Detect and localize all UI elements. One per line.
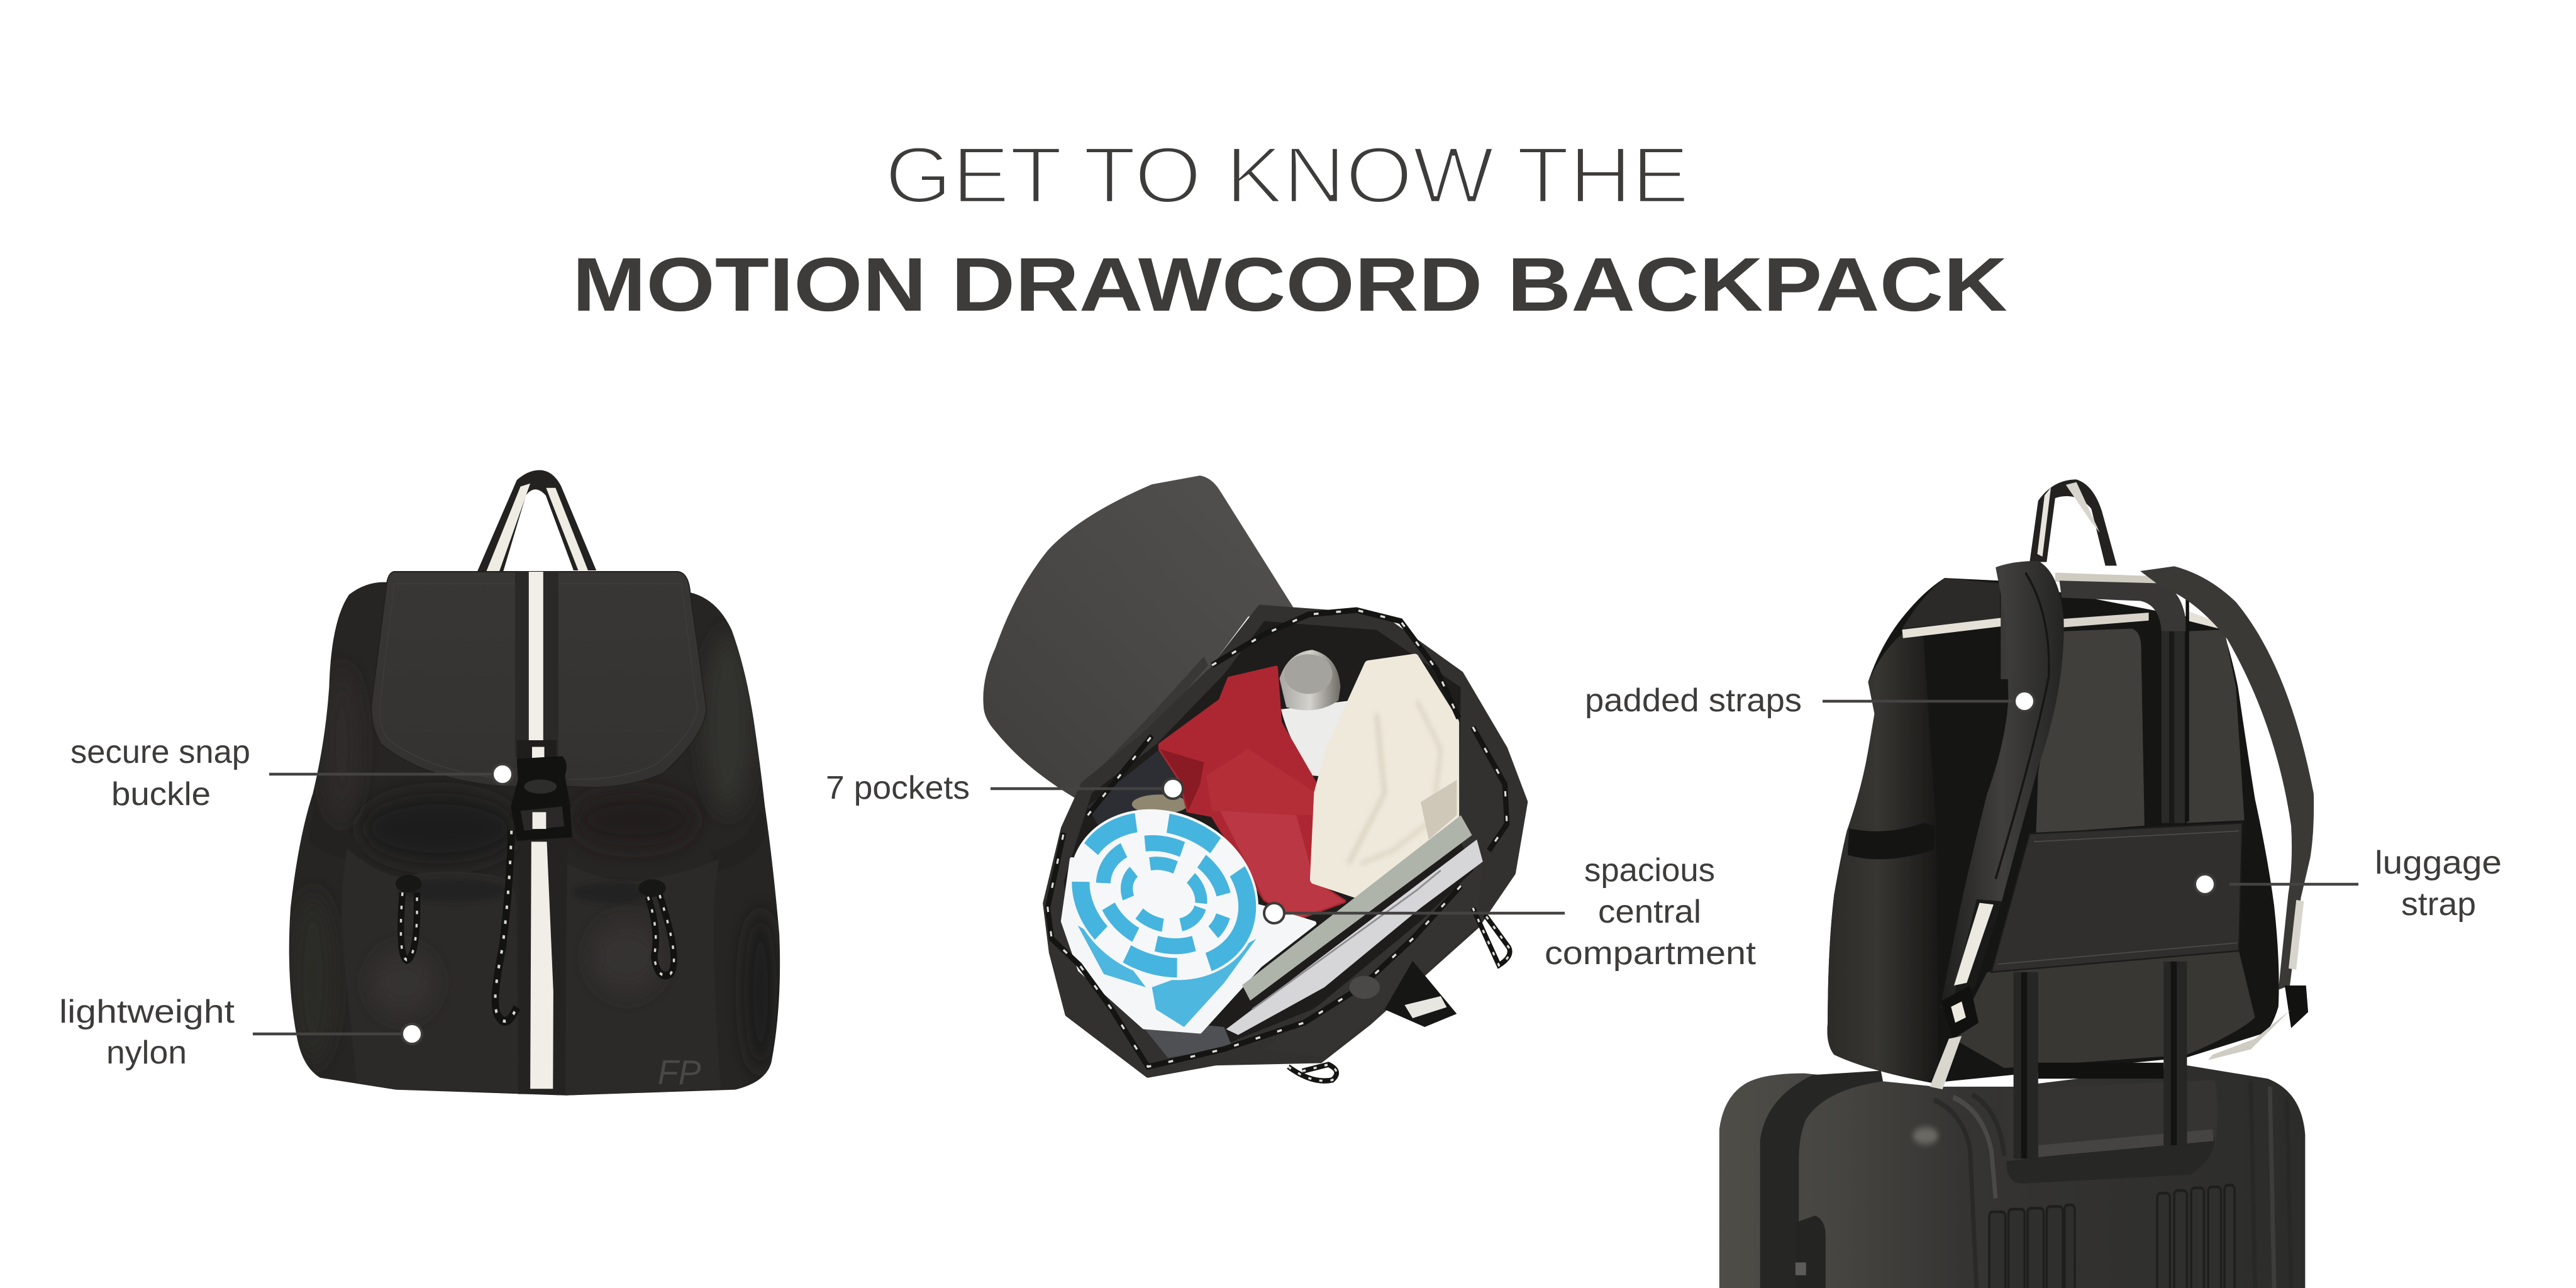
luggage top ribs <box>1913 1081 2291 1288</box>
body shading <box>291 635 777 1071</box>
rolled striped towel <box>1049 783 1279 1006</box>
right front pocket <box>565 859 721 1096</box>
leader line <box>991 787 1167 790</box>
back panel centre <box>2036 628 2145 834</box>
bar highlight <box>2038 1130 2214 1157</box>
title <box>572 130 2007 327</box>
label text: luggage <box>2375 845 2502 881</box>
back panel lower <box>1953 951 2255 1068</box>
right side pocket and elastic <box>710 809 766 870</box>
trolley pole upper <box>2001 580 2189 823</box>
lower ribs right <box>2157 1185 2235 1288</box>
callout: padded straps <box>1585 682 2035 719</box>
callout: secure snap buckle <box>70 734 513 813</box>
bag body <box>1828 578 2279 1083</box>
cream towel <box>1314 658 1457 895</box>
luggage grab bar <box>2006 1137 2215 1184</box>
callout: luggage strap <box>2195 845 2502 923</box>
callout: lightweight nylon <box>59 994 422 1071</box>
label text line 2: nylon <box>106 1035 187 1071</box>
label text line 2: buckle <box>111 776 211 813</box>
inner pocket lining <box>1088 749 1192 828</box>
centre webbing strap lower <box>518 837 567 1094</box>
leader line <box>253 1033 406 1035</box>
title line 2: MOTION DRAWCORD BACKPACK <box>572 242 2007 327</box>
title line 1: GET TO KNOW THE <box>885 130 1689 219</box>
luggage shell <box>1719 1065 2305 1288</box>
lower ribs left <box>1989 1205 2075 1288</box>
left front pocket <box>341 848 519 1092</box>
laptop <box>1226 840 1483 1035</box>
rim shadow <box>1264 862 1483 1058</box>
bag interior <box>1063 621 1479 1045</box>
label text: padded straps <box>1585 682 1802 719</box>
label text: 7 pockets <box>826 770 970 806</box>
luggage strap panel <box>1991 823 2242 972</box>
folded striped towel <box>1063 859 1314 1031</box>
central drawcord <box>495 831 517 1021</box>
trolley poles lower <box>2014 962 2187 1158</box>
combination lock <box>1796 1216 1826 1288</box>
right pocket drawcord <box>638 879 674 975</box>
leader line <box>2229 883 2358 886</box>
label text line 2: strap <box>2401 886 2476 923</box>
handle recess <box>2004 1080 2218 1164</box>
label text line 2: central <box>1598 894 1701 930</box>
top flap <box>371 572 706 787</box>
right shoulder strap <box>2140 566 2314 1060</box>
outer bag shell <box>1046 608 1525 1075</box>
flap seam <box>380 584 697 779</box>
leader line <box>269 773 497 775</box>
marker dot <box>492 764 513 784</box>
marker dot <box>2014 691 2035 711</box>
label text: secure snap <box>70 734 250 770</box>
marker dot <box>1264 903 1284 923</box>
marker dot <box>1163 779 1183 799</box>
red cap <box>1160 667 1345 919</box>
top stripe <box>1902 573 2219 638</box>
carry handle <box>477 470 596 572</box>
callout: spacious central compartment <box>1264 852 1757 972</box>
left padded shoulder strap <box>1929 561 2064 1089</box>
backpack body <box>289 582 780 1096</box>
back panel right <box>2187 630 2245 823</box>
bag side panel <box>1828 634 1938 1081</box>
callout: 7 pockets <box>826 770 1183 806</box>
cord stopper <box>1349 976 1380 999</box>
pocket shadows <box>370 879 663 1014</box>
snap buckle <box>511 756 572 841</box>
bag top flap <box>1902 578 2000 628</box>
label text: lightweight <box>59 994 235 1030</box>
luggage zipper band <box>1760 1070 1883 1288</box>
rear carry handle <box>2029 479 2117 566</box>
centre webbing strap upper <box>515 572 558 767</box>
brand logo: FP <box>658 1053 701 1092</box>
magazine <box>1242 815 1472 1001</box>
leader line <box>1823 700 2019 702</box>
interior lining lower <box>1136 1018 1232 1058</box>
leader line <box>1280 912 1565 914</box>
webbing strap and buckle <box>1385 961 1457 1027</box>
panel: rear view backpack on luggage <box>1719 479 2314 1288</box>
striped object peeking from pocket <box>1132 794 1188 814</box>
cord loop bottom <box>1288 1065 1336 1081</box>
label text: spacious <box>1584 852 1715 889</box>
drawcord around opening <box>1048 610 1507 1067</box>
water bottle <box>1279 650 1353 778</box>
panel: open top view backpack <box>983 475 1525 1081</box>
left pocket drawcord <box>396 875 421 960</box>
marker dot <box>402 1024 422 1044</box>
label text line 3: compartment <box>1545 935 1757 972</box>
panel: front view backpack <box>289 470 780 1096</box>
marker dot <box>2195 874 2215 894</box>
side pocket elastic <box>1848 823 1935 859</box>
left side pocket and elastic <box>309 800 364 862</box>
open flap <box>983 475 1293 802</box>
cord loop right <box>1473 908 1510 965</box>
